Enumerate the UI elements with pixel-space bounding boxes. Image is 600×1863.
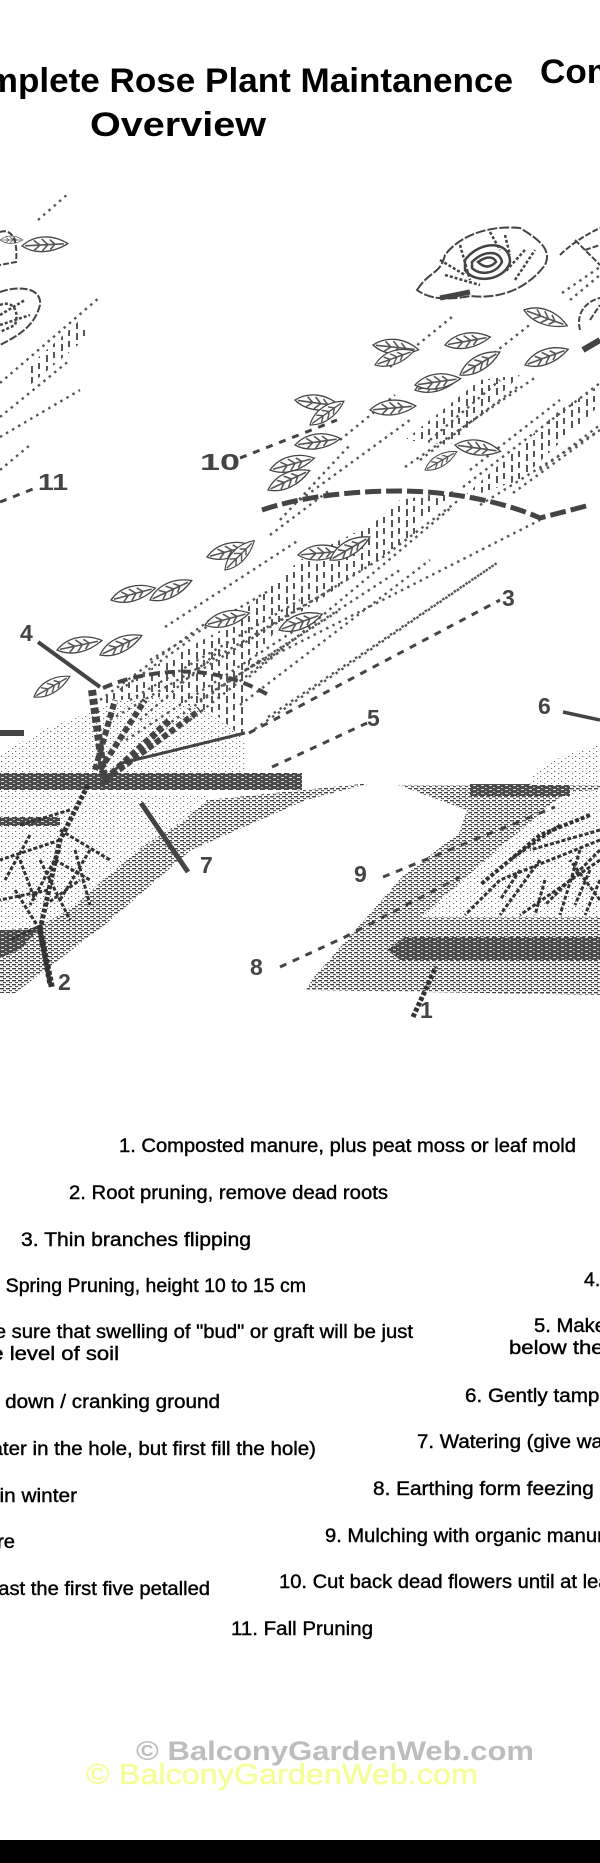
left plant roots [0,785,110,985]
arrow: label 7 [141,803,213,878]
left soil pit [0,773,371,993]
arrow: label 4: 4 [20,620,33,646]
arrow: label 3: 3 [502,585,515,611]
right mound [530,745,600,785]
legend row 11: 11. Fall Pruning [231,1619,373,1640]
arrow: label 4 [20,620,100,687]
arrow: label 9 [354,807,555,887]
legend row 9: 9. Mulching with organic manure [325,1526,600,1547]
illustration: rose planting diagram [0,193,600,1023]
legend row 7 [0,1432,600,1460]
arrow: label 7: 7 [200,852,213,878]
left mound [0,697,245,773]
arrow: label 10: 10 [200,449,240,475]
black footer bar [0,1840,600,1863]
arrow: label 11 [0,469,68,502]
arrow: label 10 [200,420,337,475]
arrow: label 2 [40,930,71,995]
arrow: label 5 [272,705,380,767]
arrow: label 6 [0,693,600,733]
arrow: label 8: 8 [250,954,263,980]
upper plant dashed branches [0,193,600,535]
right soil pit [306,784,600,995]
dashed arc, left plant [103,672,272,697]
left plant leaves [30,530,373,702]
right plant roots [465,815,600,915]
arrow: label 1: 1 [420,997,433,1023]
legend row 5 [0,1316,600,1365]
left plant stem fan [92,690,245,785]
title: Overview [90,106,267,144]
watermark: grey: © BalconyGardenWeb.com [136,1736,534,1766]
legend row 3: 3. Thin branches flipping [21,1230,251,1251]
legend row 4 [0,1270,600,1297]
arrow: label 9: 9 [354,861,367,887]
dashed arc, upper plant [262,491,590,518]
legend row 2: 2. Root pruning, remove dead roots [69,1183,388,1204]
arrow: label 6: 6 [538,693,551,719]
dashed branches, left plant [100,500,540,740]
icon: wrapped rose blooms [0,228,600,350]
legend row 8 [0,1479,600,1507]
arrow: label 8 [250,877,460,980]
plant shading texture [30,320,600,770]
arrow: label 3 [249,585,515,733]
arrow: label 2: 2 [58,969,71,995]
arrow: label 11: 11 [38,469,68,495]
legend text list [0,1136,600,1640]
title [0,53,600,144]
arrow: label 1 [413,967,436,1023]
upper plant leaves [0,236,571,496]
icon: rose bloom [417,227,547,298]
legend row 1: 1. Composted manure, plus peat moss or leaf mold [119,1136,576,1157]
legend row 10 [0,1572,600,1600]
watermark: yellow: © BalconyGardenWeb.com [86,1759,478,1791]
legend row 6 [0,1386,600,1413]
arrow: label 5: 5 [367,705,380,731]
